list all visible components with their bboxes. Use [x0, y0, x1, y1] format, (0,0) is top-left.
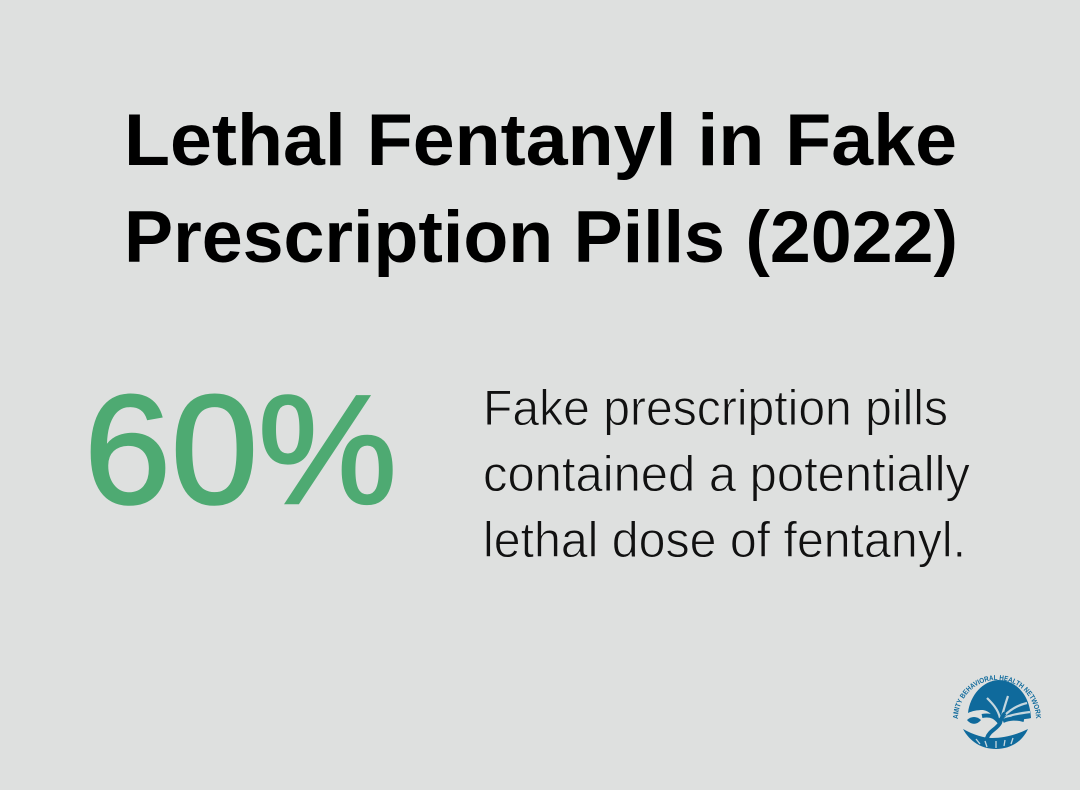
- title: Prescription Pills (2022): [124, 197, 958, 278]
- title: Lethal Fentanyl in Fake: [124, 100, 957, 181]
- statistic: 60%: 60%: [84, 363, 397, 536]
- logo ring text: AMITY BEHAVIORAL HEALTH NETWORK: [953, 675, 1041, 719]
- logo root gaps: [976, 738, 1013, 748]
- description text: Fake prescription pills: [483, 380, 948, 436]
- description text: lethal dose of fentanyl.: [483, 512, 966, 568]
- logo tree canopy: [968, 680, 1031, 724]
- logo roots bowl: [963, 729, 1028, 749]
- title: [124, 100, 958, 278]
- logo tree trunk and branches: [982, 713, 1024, 738]
- description text: [483, 380, 970, 568]
- logo lower-left foliage: [967, 717, 981, 724]
- description text: contained a potentially: [483, 446, 970, 502]
- logo light branch gaps: [987, 696, 1030, 718]
- icon: Amity Behavioral Health Network logo: [953, 675, 1041, 749]
